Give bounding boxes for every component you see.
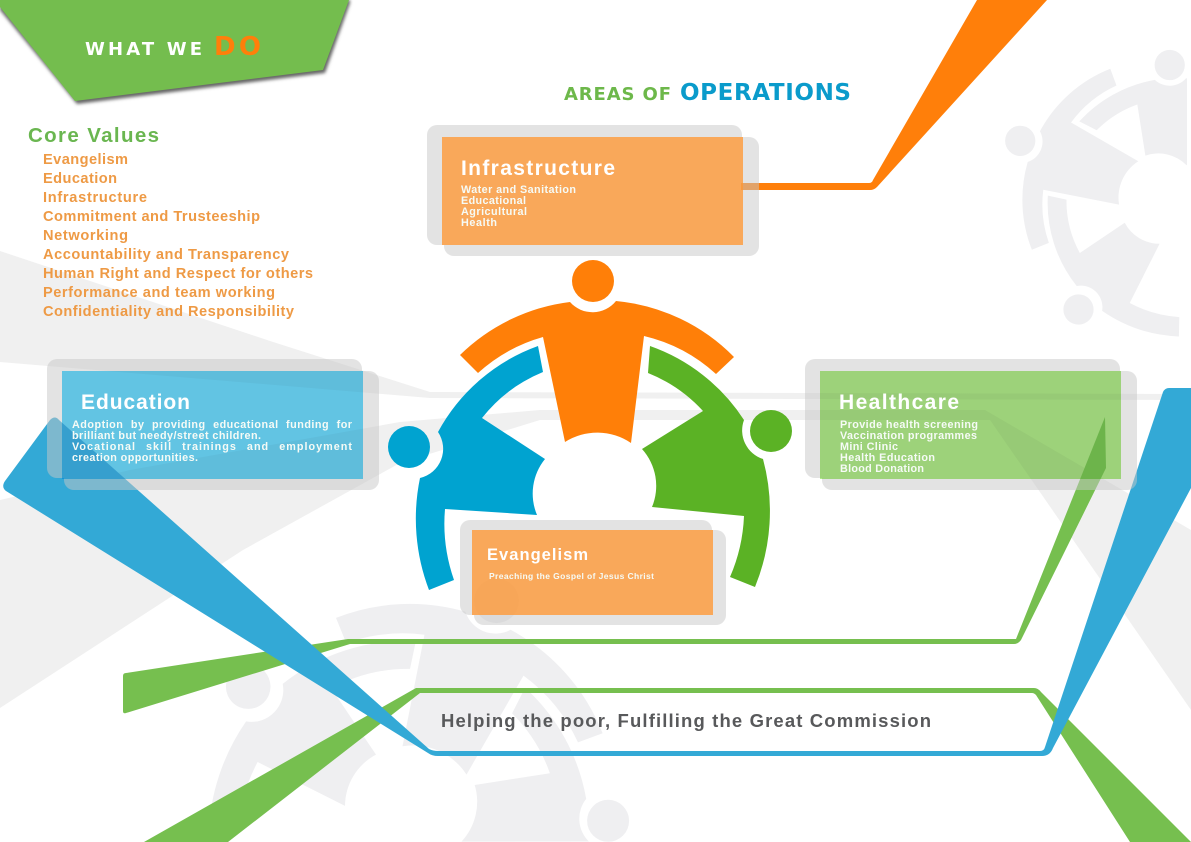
core values heading: Core Values [28, 124, 159, 147]
title part one: AREAS OF [564, 84, 671, 105]
banner title accent: DO [214, 32, 261, 62]
education heading: Education [81, 391, 190, 414]
core values list: Networking [43, 228, 128, 244]
title part two: OPERATIONS [680, 80, 851, 106]
central logo: three people [388, 260, 792, 590]
banner: what we do [0, 0, 350, 104]
person: orange [460, 260, 734, 443]
watermark logo: bottom centre [208, 578, 629, 842]
panel: infrastructure [427, 125, 759, 256]
core values list: Evangelism [43, 152, 128, 168]
healthcare list [840, 419, 978, 475]
panel: education [47, 359, 379, 490]
banner title: WHAT WE [85, 39, 202, 60]
evangelism heading: Evangelism [487, 546, 588, 564]
healthcare list: Health Education [840, 452, 935, 464]
panel: healthcare [805, 359, 1137, 490]
green ribbon: frame top and wedges [144, 688, 1191, 842]
core values list: Commitment and Trusteeship [43, 209, 260, 225]
healthcare list: Mini Clinic [840, 441, 898, 453]
panel: evangelism [460, 520, 726, 625]
person: green [642, 346, 792, 587]
banner shape [0, 0, 349, 101]
orange ribbon: top right connector [741, 0, 1047, 190]
background: pale grey wedges [0, 251, 1191, 710]
education body text: Adoption by providing educational funding for [72, 419, 353, 431]
tagline: Helping the poor, Fulfilling the Great Commission [441, 710, 931, 731]
infrastructure list: Agricultural [461, 206, 527, 218]
healthcare heading: Healthcare [839, 391, 959, 414]
green ribbon: upper band [123, 417, 1106, 713]
infrastructure list [461, 184, 576, 229]
infrastructure list: Educational [461, 195, 526, 207]
core values list: Accountability and Transparency [43, 247, 290, 263]
blue ribbon: frame bottom and wedges [3, 388, 1191, 756]
core values list: Confidentiality and Responsibility [43, 304, 295, 320]
core values list: Performance and team working [43, 285, 275, 301]
core values list [43, 152, 313, 320]
healthcare list: Blood Donation [840, 463, 924, 475]
education body text: Vocational skill trainings and employment [72, 441, 352, 453]
healthcare list: Provide health screening [840, 419, 978, 431]
infrastructure list: Water and Sanitation [461, 184, 576, 196]
person: blue [388, 346, 545, 590]
watermark logo: top right [1005, 50, 1187, 336]
core values list: Infrastructure [43, 190, 147, 206]
core values list: Education [43, 171, 117, 187]
evangelism body text: Preaching the Gospel of Jesus Christ [489, 571, 654, 581]
healthcare list: Vaccination programmes [840, 430, 977, 442]
education body text [72, 419, 353, 464]
banner shadow [0, 0, 350, 104]
core values list: Human Right and Respect for others [43, 266, 313, 282]
title: areas of operations [564, 80, 851, 106]
infrastructure list: Health [461, 217, 497, 229]
education body text: brilliant but needy/street children. [72, 430, 261, 442]
education body text: creation opportunities. [72, 452, 198, 464]
infrastructure heading: Infrastructure [461, 157, 615, 180]
text block: core values [28, 124, 313, 320]
